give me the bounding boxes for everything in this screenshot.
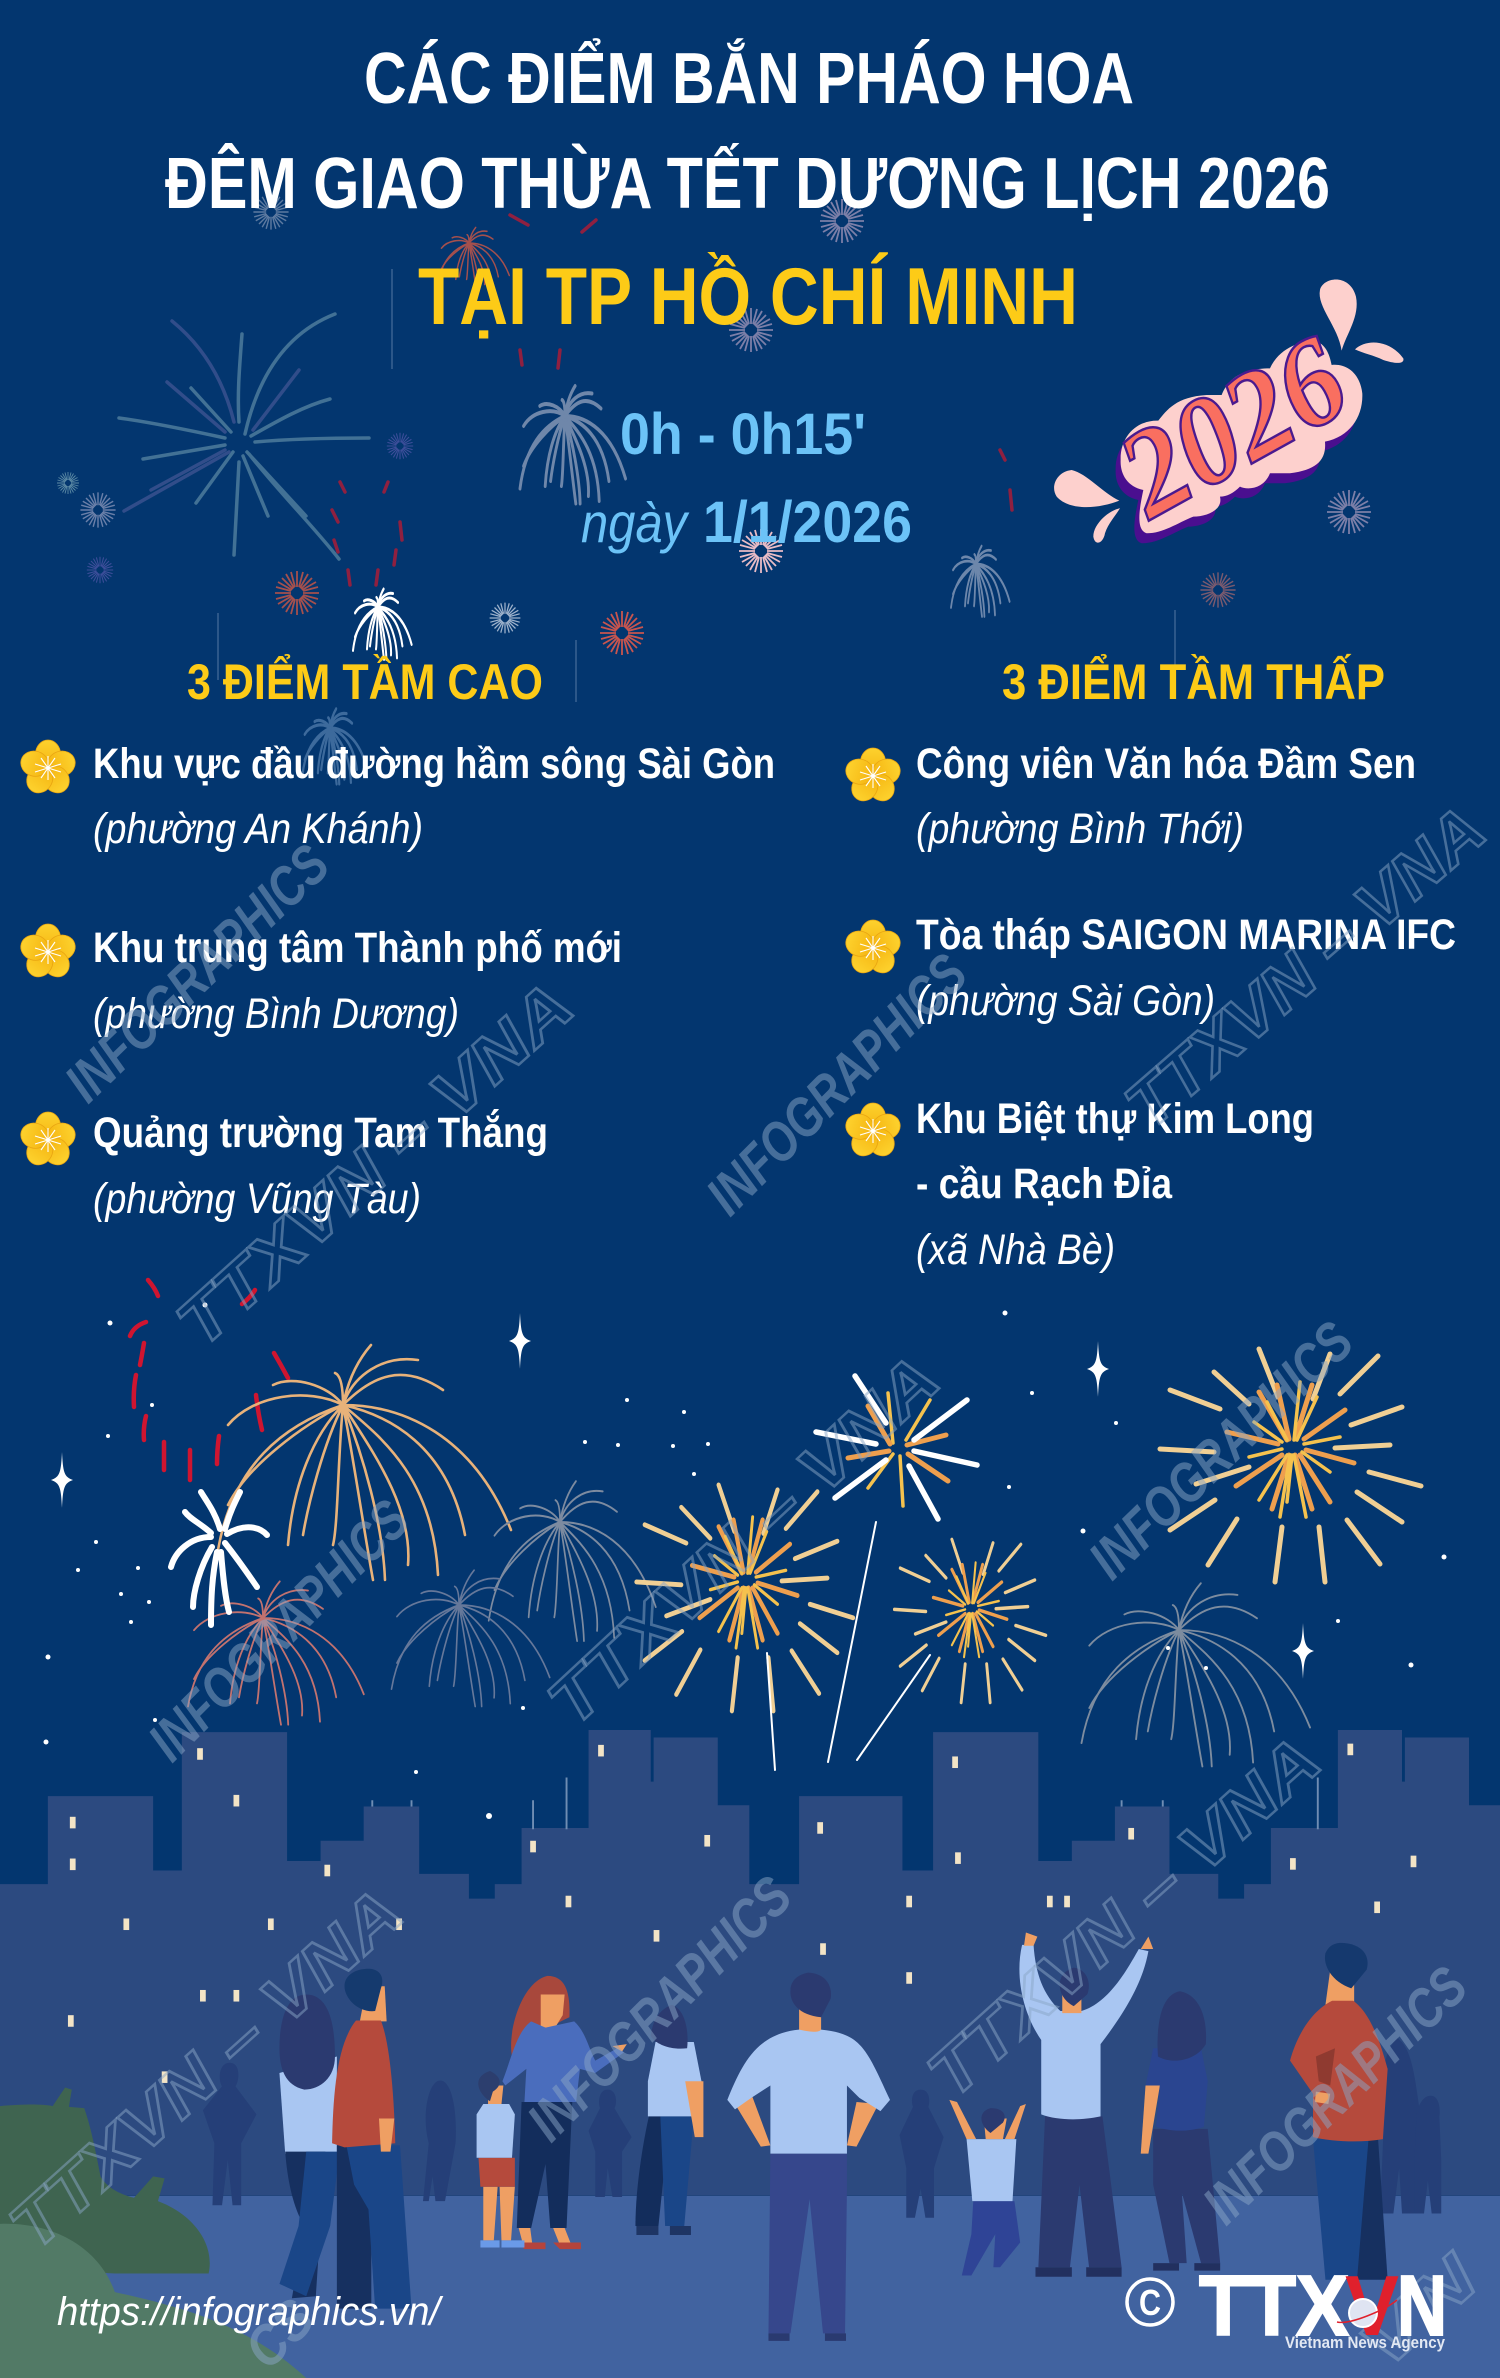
item 1	[916, 740, 1416, 853]
icon: flower 3	[843, 1103, 903, 1161]
item 1: (phường Bình Thới)	[916, 805, 1244, 853]
item 2: Khu trung tâm Thành phố mới	[93, 924, 622, 972]
heading: 3 ĐIỂM TẦM THẤP	[1002, 654, 1385, 710]
item 3: (phường Vũng Tàu)	[93, 1175, 421, 1223]
person: woman with red hair	[502, 1976, 627, 2249]
watermark: ttxvn - vna	[0, 791, 1499, 2378]
watermark: infographics	[53, 832, 1479, 2378]
stars	[51, 1313, 1314, 1679]
faint tall lines	[218, 269, 1175, 702]
person: woman with dark hair	[279, 1995, 340, 2298]
item 3	[916, 1095, 1314, 1274]
watermark: infographics: INFOGRAPHICS	[694, 942, 979, 1226]
badge shapes	[1054, 280, 1403, 543]
item 3: - cầu Rạch Đỉa	[916, 1160, 1173, 1208]
watermark: infographics: CS	[232, 2286, 326, 2378]
person: child with red shorts	[477, 2071, 524, 2247]
watermark: infographics: INFOGRAPHICS	[136, 1488, 421, 1772]
logo globe	[1337, 2299, 1397, 2327]
watermark: infographics: INFOGRAPHICS	[53, 832, 341, 1114]
logo letters TTX: TTX	[1199, 2259, 1349, 2354]
burst 4 white and gold	[816, 1376, 977, 1519]
item 2: (phường Sài Gòn)	[916, 977, 1215, 1025]
faded fireworks behind the header	[57, 194, 1371, 784]
item 1: Khu vực đầu đường hầm sông Sài Gòn	[93, 740, 775, 788]
faint palm behind heading	[302, 709, 367, 784]
large teal firework	[119, 314, 369, 559]
person: man in red	[332, 1969, 412, 2309]
icon: flower 2	[843, 920, 903, 978]
watermark: ttxvn - vna: TTXVN – VNA	[533, 1341, 953, 1739]
watermark: infographics: INFOGRAPHICS	[1077, 1309, 1365, 1591]
burst 1	[1160, 1349, 1421, 1582]
small puffs	[820, 199, 864, 243]
antennas	[372, 1778, 1318, 1829]
faded palm 1	[489, 1481, 656, 1641]
person: woman with white shirt	[635, 2005, 703, 2235]
faded palm 2	[392, 1570, 550, 1706]
person: child with arms up	[949, 2100, 1026, 2276]
person: woman in dark blue	[1141, 1991, 1220, 2271]
faded red palm	[439, 227, 509, 288]
light bush	[0, 2224, 306, 2378]
item 3: Quảng trường Tam Thắng	[93, 1108, 548, 1157]
title	[165, 38, 1330, 342]
badge number: 2026	[1095, 310, 1370, 545]
title line 3: TẠI TP HỒ CHÍ MINH	[418, 251, 1078, 342]
dark bush	[0, 2088, 210, 2273]
background silhouettes	[203, 2038, 1441, 2218]
burst 3	[894, 1539, 1046, 1702]
person: man in red at right	[1290, 1943, 1388, 2280]
item 1: (phường An Khánh)	[93, 805, 423, 853]
item 3: Khu Biệt thự Kim Long	[916, 1095, 1314, 1143]
watermark: ttxvn - vna: TTXVN – VNA	[0, 1874, 416, 2263]
watermark: infographics: INFOGRAPHICS	[515, 1864, 803, 2152]
logo tagline: Vietnam News Agency	[1285, 2333, 1445, 2352]
watermarks	[0, 791, 1499, 2378]
item 3: (xã Nhà Bè)	[916, 1226, 1115, 1274]
faded palm 3	[1082, 1583, 1310, 1766]
watermark: ttxvn - vna: TTXVN – VNA	[162, 968, 587, 1360]
small grey palm right	[951, 546, 1010, 616]
white palm	[171, 1492, 267, 1625]
time: 0h - 0h15'	[620, 402, 866, 467]
item 2	[916, 911, 1456, 1025]
title line 1: CÁC ĐIỂM BẮN PHÁO HOA	[364, 38, 1134, 119]
illustration: city skyline	[0, 1730, 1500, 2196]
item 2	[93, 924, 622, 1038]
copyright symbol	[1127, 2279, 1173, 2325]
rising trails	[767, 1522, 930, 1770]
buildings	[0, 1730, 1500, 2196]
panel: high altitude points	[18, 654, 775, 1223]
ground	[0, 2196, 1500, 2378]
person: man with arms raised	[1019, 1933, 1153, 2277]
small dots	[44, 1302, 1446, 1819]
windows	[68, 1744, 1416, 2083]
item 2: (phường Bình Dương)	[93, 990, 459, 1038]
red palm	[188, 1581, 364, 1725]
icon: flower 1	[843, 748, 903, 806]
item 1: Công viên Văn hóa Đầm Sen	[916, 740, 1416, 788]
item 1	[93, 740, 775, 853]
logo letter V: V	[1345, 2259, 1399, 2354]
red sparks	[332, 215, 1012, 585]
white small palm firework	[353, 589, 412, 660]
icon: flower 2	[18, 924, 78, 982]
watermark: ttxvn - vna: TTXVN – VNA	[913, 1722, 1334, 2111]
red sparks	[130, 1280, 288, 1480]
icon: flower 3	[18, 1112, 78, 1170]
heading: 3 ĐIỂM TẦM CAO	[187, 654, 543, 710]
footer url: https://infographics.vn/	[57, 2290, 444, 2334]
date label: ngày	[581, 491, 690, 554]
illustration: crowd	[203, 1933, 1441, 2341]
item 3	[93, 1108, 548, 1223]
copyright symbol: C	[1139, 2282, 1161, 2323]
illustration: bushes	[0, 2088, 306, 2378]
grey palm firework near the time	[520, 386, 625, 504]
logo letter N: N	[1397, 2259, 1447, 2354]
illustration: fireworks	[44, 1280, 1446, 1819]
burst 2	[636, 1485, 853, 1711]
time and date	[581, 402, 912, 555]
big gold palm	[218, 1345, 511, 1580]
watermark: ttxvn - vna: TTXVN – VNA	[1111, 791, 1499, 1143]
person: large man from behind	[727, 1973, 890, 2341]
date value: 1/1/2026	[703, 490, 912, 555]
logo: TTXVN	[1127, 2259, 1447, 2354]
icon: flower 1	[18, 740, 78, 798]
badge: 2026	[1054, 280, 1403, 545]
panel: low altitude points	[843, 654, 1456, 1274]
